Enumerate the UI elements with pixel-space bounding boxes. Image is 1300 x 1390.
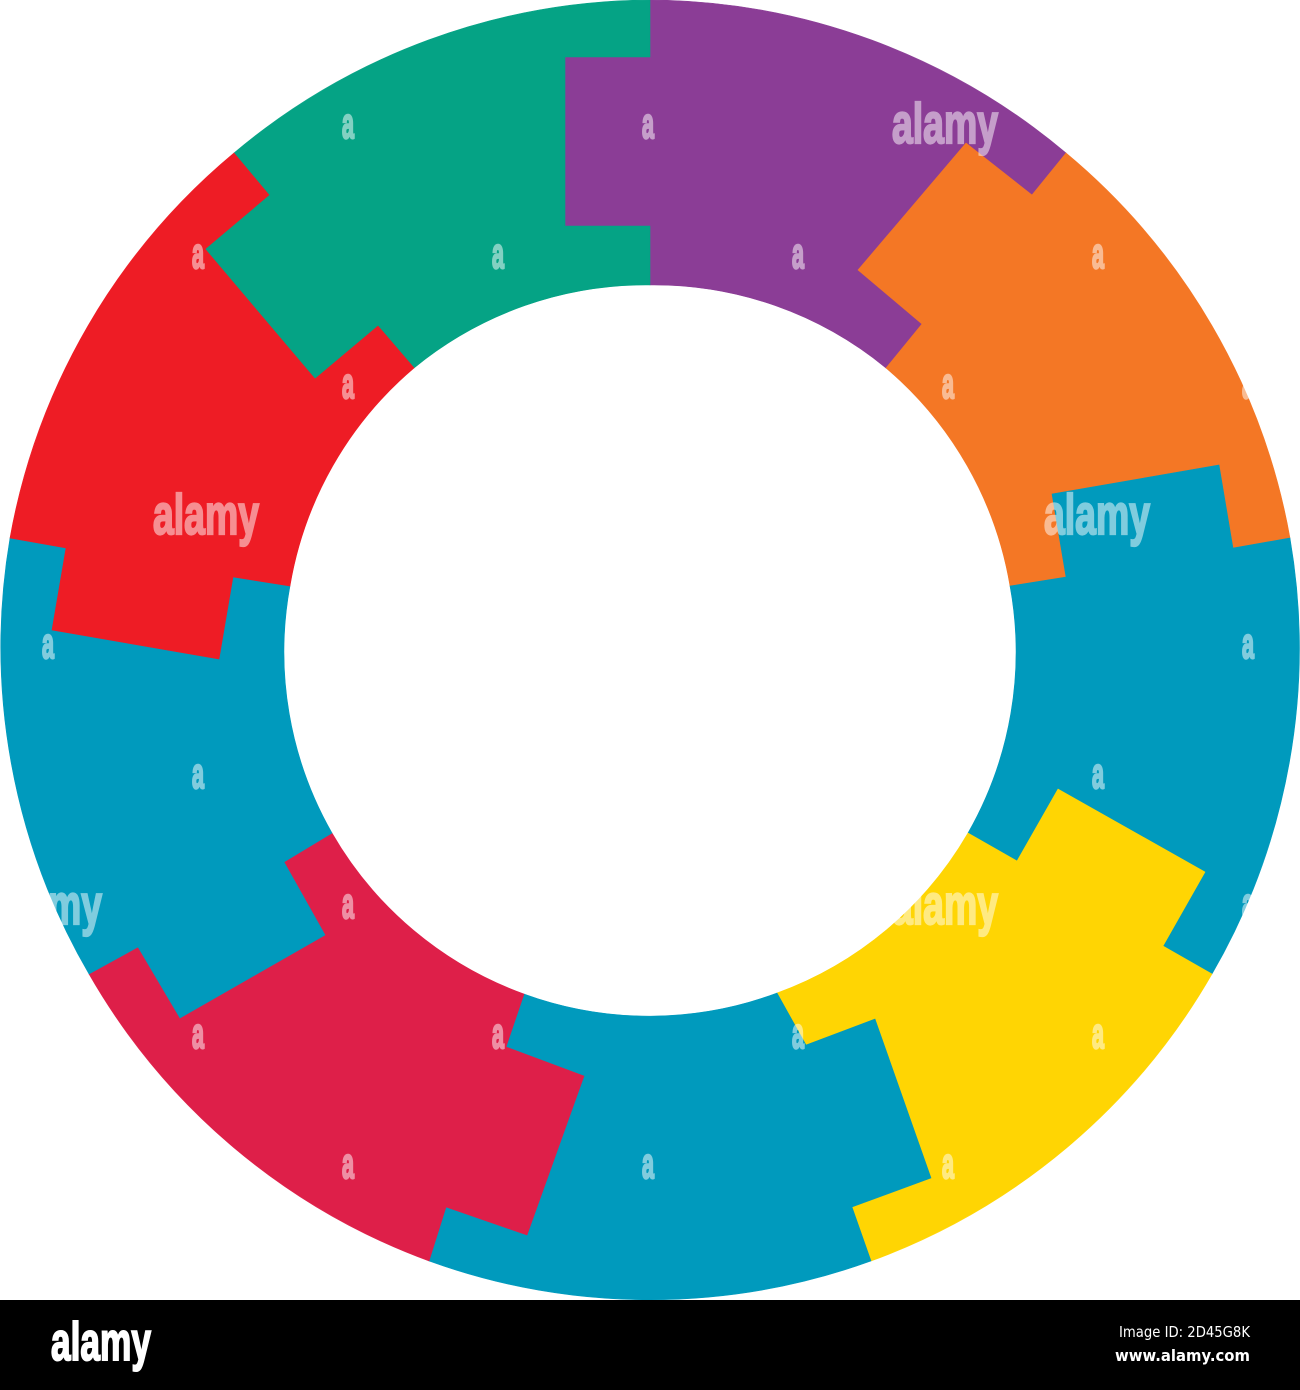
segment: blue bottom: [429, 993, 931, 1300]
image id: Image ID: 2D45G8K: [1119, 1323, 1251, 1341]
watermark overlay: [0, 92, 1255, 1188]
watermark overlay: alamy: [892, 873, 998, 937]
watermark overlay: a: [642, 100, 655, 148]
watermark overlay: a: [942, 1140, 955, 1188]
segment: yellow: [777, 789, 1212, 1261]
watermark overlay: a: [342, 360, 355, 408]
watermark overlay: a: [1242, 880, 1255, 928]
watermark overlay: a: [642, 1140, 655, 1188]
segment: purple: [565, 0, 1066, 368]
watermark overlay: alamy: [1044, 483, 1150, 547]
watermark overlay: a: [942, 360, 955, 408]
watermark overlay: alamy: [153, 483, 259, 547]
watermark overlay: a: [1092, 750, 1105, 798]
segment: blue left: [1, 538, 332, 1018]
footer bar: [0, 1300, 1300, 1390]
watermark overlay: a: [492, 1010, 505, 1058]
watermark overlay: a: [1242, 360, 1255, 408]
watermark overlay: a: [192, 750, 205, 798]
segment: crimson: [89, 833, 584, 1261]
segment: blue right: [968, 465, 1299, 974]
segment: red: [10, 153, 414, 659]
watermark overlay: a: [792, 230, 805, 278]
watermark overlay: a: [192, 230, 205, 278]
website url: www.alamy.com: [1115, 1346, 1250, 1365]
watermark overlay: a: [342, 880, 355, 928]
watermark overlay: a: [342, 100, 355, 148]
watermark overlay: a: [492, 230, 505, 278]
segment: orange: [858, 143, 1290, 586]
watermark overlay: a: [42, 620, 55, 668]
watermark overlay: alamy: [892, 92, 998, 156]
footer logo: alamy: [51, 1312, 151, 1372]
watermark overlay: a: [792, 1010, 805, 1058]
watermark overlay: alamy: [0, 873, 102, 937]
watermark overlay: a: [1242, 620, 1255, 668]
watermark overlay: a: [1092, 230, 1105, 278]
segment: green: [205, 0, 650, 379]
watermark overlay: a: [192, 1010, 205, 1058]
watermark overlay: a: [342, 1140, 355, 1188]
watermark overlay: a: [1092, 1010, 1105, 1058]
